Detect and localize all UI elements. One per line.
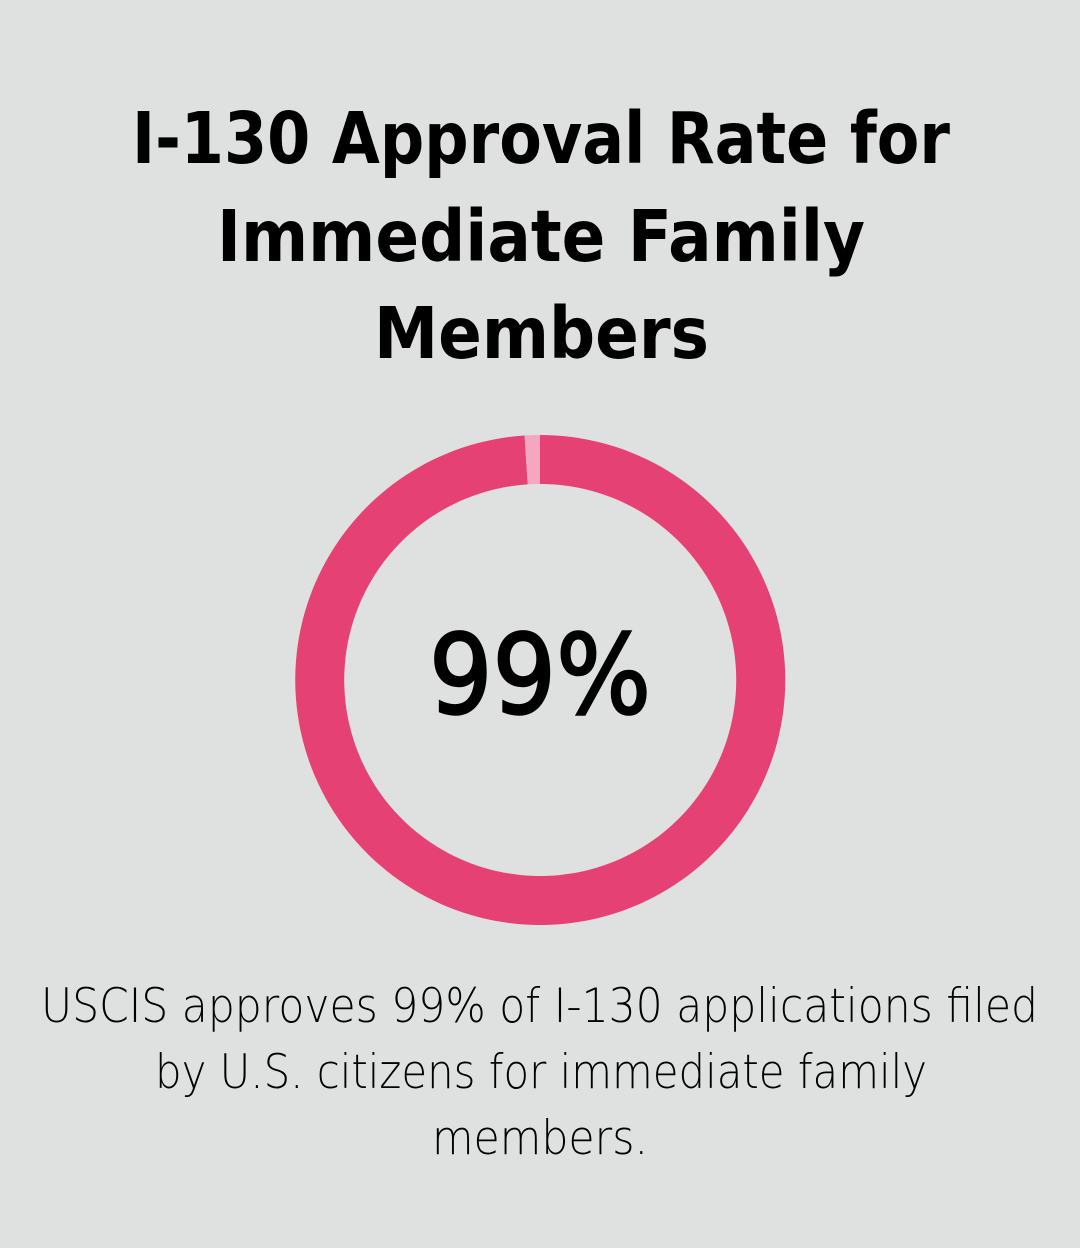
description text: by U.S. citizens for immediate family bbox=[155, 1045, 927, 1100]
title: I-130 Approval Rate for bbox=[132, 97, 950, 180]
main segment: 99 percent bbox=[295, 435, 785, 925]
center value: 99% bbox=[429, 611, 651, 739]
donut chart: 99% bbox=[295, 435, 785, 925]
title bbox=[132, 97, 950, 375]
description text: members. bbox=[432, 1111, 648, 1166]
remainder segment: 1 percent bbox=[525, 435, 540, 484]
description text bbox=[41, 979, 1038, 1166]
title: Immediate Family bbox=[217, 195, 865, 278]
title: Members bbox=[374, 292, 709, 375]
